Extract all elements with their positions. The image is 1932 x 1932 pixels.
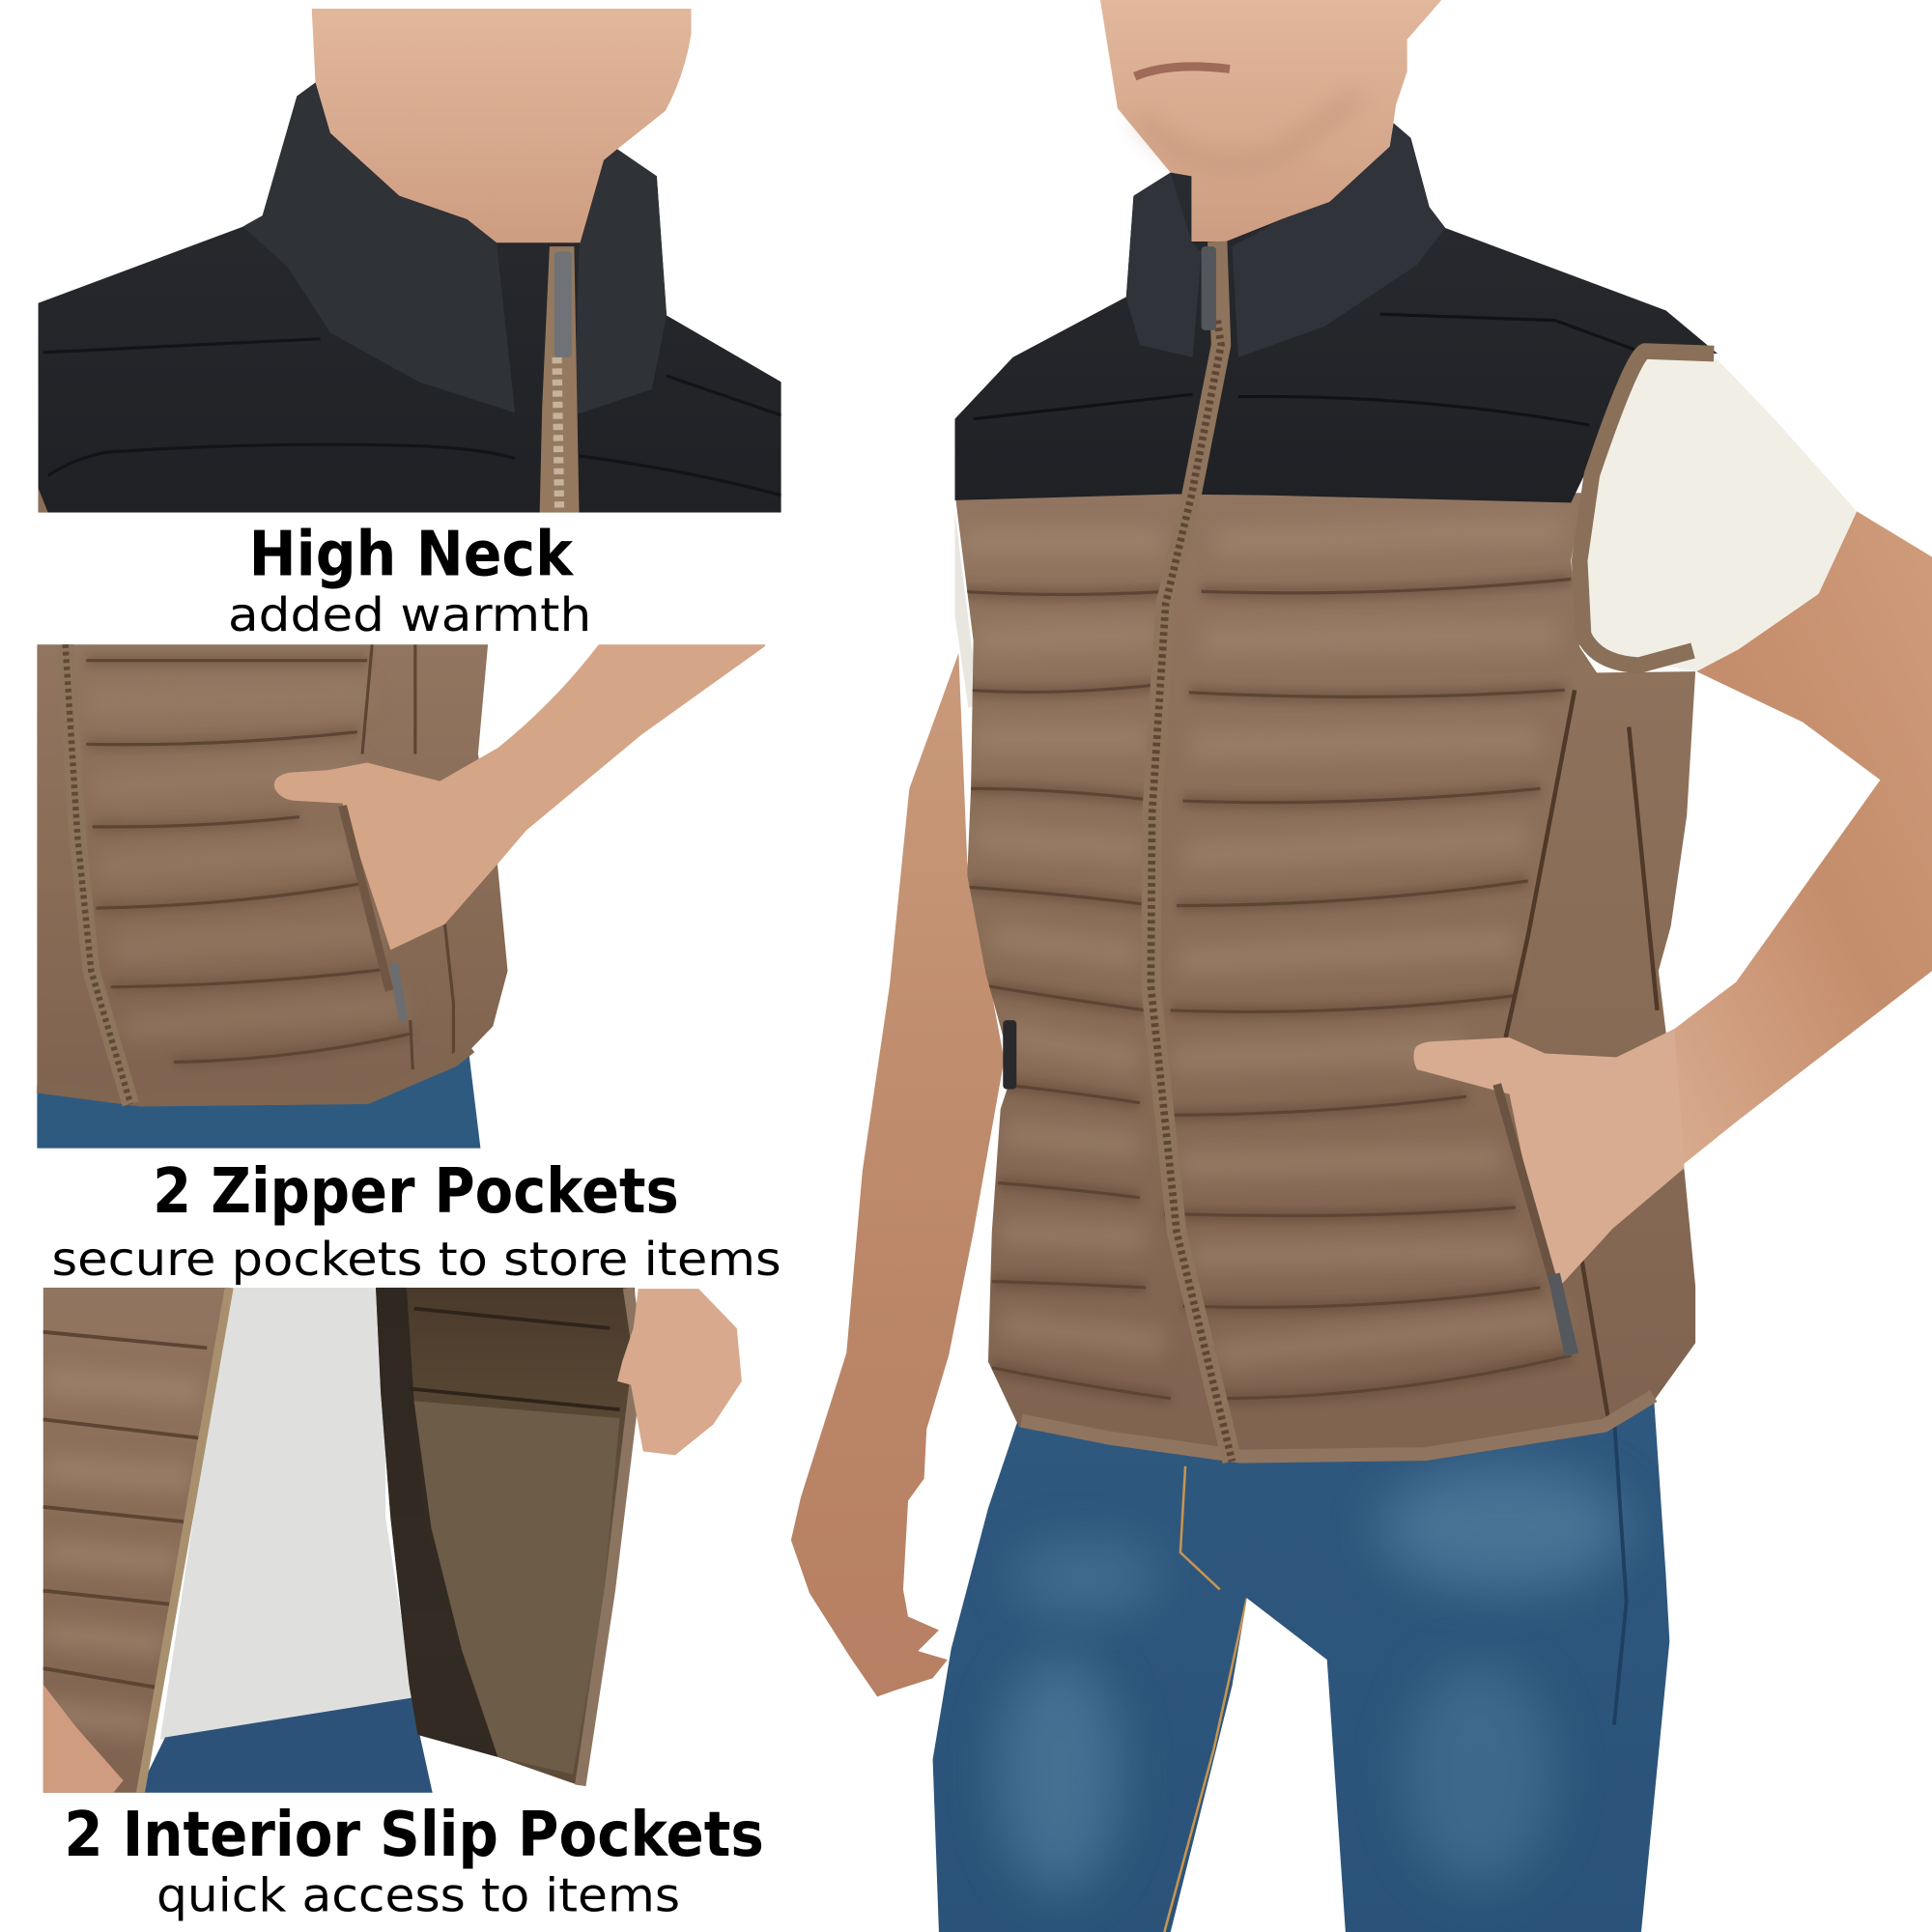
yoke quilting — [974, 314, 1638, 425]
zipper pull — [554, 251, 572, 357]
arm and hand in pocket — [274, 644, 768, 950]
slip pocket — [414, 1401, 620, 1775]
jaw shadow — [1140, 95, 1359, 163]
lower hand — [43, 1685, 124, 1793]
subtitle: secure pockets: secure pockets to store items — [52, 1233, 781, 1287]
vest interior lining — [376, 1288, 639, 1785]
front zipper — [66, 644, 130, 1104]
front zipper — [1151, 242, 1233, 1462]
quilting — [961, 529, 1658, 1417]
left zipper — [140, 1288, 229, 1793]
chin and neck skin — [312, 9, 692, 252]
collar flap shading — [242, 82, 667, 415]
hand over pocket — [1413, 1029, 1685, 1288]
black yoke and collar — [955, 124, 1718, 502]
panel: high neck photo — [39, 9, 781, 513]
dark inner band — [376, 1288, 497, 1757]
jeans — [138, 1698, 433, 1793]
hem trim — [37, 1047, 470, 1100]
brown vest front — [37, 644, 508, 1106]
pocket zipper — [1497, 1084, 1555, 1288]
hand holding vest — [617, 1289, 742, 1455]
panel: zipper pockets photo — [37, 644, 768, 1149]
left tee sliver — [955, 511, 980, 708]
mouth — [1135, 67, 1230, 76]
right arm — [1616, 511, 1932, 1171]
pocket zipper — [343, 806, 389, 991]
pocket and lining seams — [409, 1309, 620, 1409]
hem trim — [1021, 1396, 1654, 1457]
collar zipper pull — [1202, 246, 1216, 330]
pocket zipper pull — [1548, 1273, 1578, 1356]
collar highlight — [1126, 124, 1445, 357]
subtitle: quick access: quick access to items — [156, 1868, 680, 1922]
left pocket zipper — [1003, 1020, 1016, 1090]
puffy highlights and seams — [86, 644, 453, 1069]
heading: zipper pockets: 2 Zipper Pockets — [153, 1156, 679, 1228]
heading: high neck: High Neck — [249, 520, 575, 591]
subtitle: added warmth: added warmth — [228, 588, 591, 642]
panel: interior pockets photo — [43, 1288, 742, 1793]
white tee — [160, 1288, 414, 1740]
zipper pull — [389, 962, 408, 1023]
jeans — [933, 1392, 1669, 1932]
black vest with high collar — [39, 82, 781, 513]
jeans — [37, 1047, 480, 1149]
left arm and hand — [791, 653, 1005, 1696]
quilting lines — [43, 1332, 207, 1688]
white tee sleeve — [1588, 355, 1857, 671]
brown trim corner — [39, 488, 48, 513]
heading: interior pockets: 2 Interior Slip Pockets — [64, 1800, 764, 1871]
armhole trim — [1579, 352, 1714, 666]
head and neck — [1100, 0, 1441, 252]
brown vest left side — [43, 1288, 229, 1793]
quilting seams — [43, 339, 781, 496]
right zipper — [581, 1288, 639, 1785]
brown vest body — [955, 493, 1695, 1463]
puffy highlights — [43, 1380, 203, 1725]
panel: main model photo — [791, 0, 1932, 1932]
brown zipper — [540, 246, 579, 513]
